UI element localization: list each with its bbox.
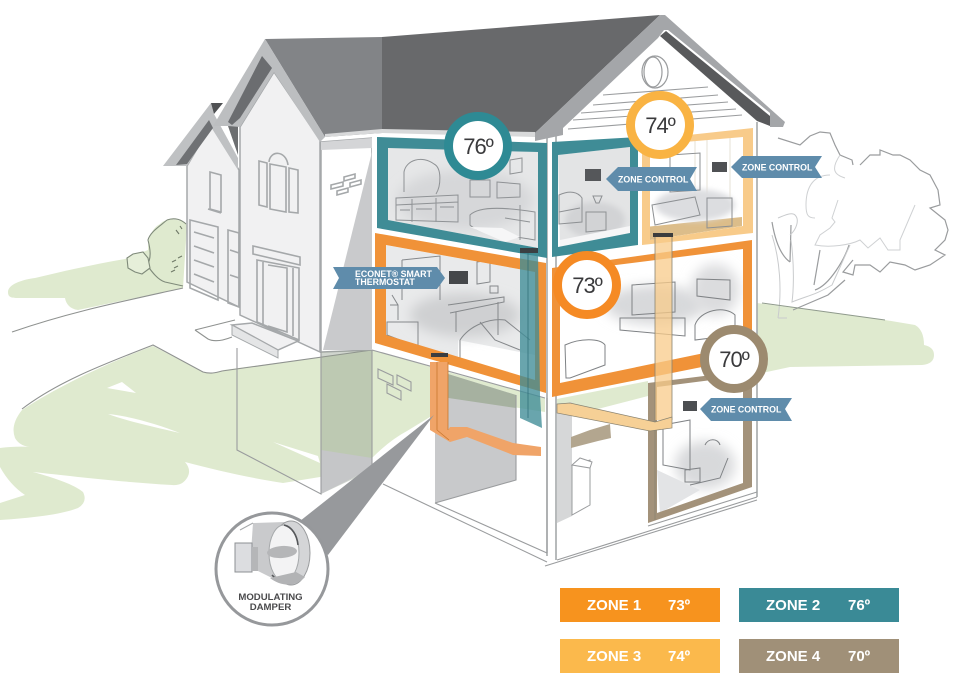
badge: 70 degrees: 70º (719, 347, 750, 372)
furniture: zone 1 left bedroom (385, 245, 535, 380)
furniture: zone 2 right bedroom (558, 147, 630, 247)
zone 3 frame (642, 128, 753, 245)
badge: 74 degrees: 74º (645, 113, 676, 138)
duct: zone 3 vertical (653, 233, 673, 520)
zone 4 frame (648, 370, 752, 523)
legend: zone 3: ZONE 3 (587, 648, 641, 665)
lawn (0, 220, 934, 520)
legend: zone 2 (739, 588, 899, 622)
shrub (127, 219, 186, 286)
zone 1 frames (375, 233, 752, 397)
front windows (259, 153, 298, 213)
callout: econet smart thermostat (333, 267, 445, 289)
side wall (321, 138, 372, 352)
legend: zone 1: 73º (668, 597, 691, 614)
path lines (12, 288, 372, 409)
duct: zone 3 horizontal (557, 403, 672, 431)
bricks (331, 174, 361, 195)
house shell (163, 15, 785, 560)
tree (762, 132, 948, 320)
wall shadow (323, 152, 372, 350)
rear gable roof (163, 103, 238, 170)
legend: zone 3: 74º (668, 648, 691, 665)
garage door (190, 172, 239, 307)
left roof (265, 37, 382, 137)
callout wedge to damper (300, 415, 434, 555)
icon: damper (235, 521, 310, 585)
green through basement (557, 381, 648, 411)
furniture: zone 3 bedroom (645, 137, 742, 240)
zone 2 frames (377, 137, 638, 258)
badge: 70 degrees (704, 330, 764, 388)
legend: zone 1 (560, 588, 720, 622)
legend: zone 4: ZONE 4 (766, 648, 821, 665)
furniture: zone 2 left bedroom (387, 147, 538, 248)
legend: zone 2: 76º (848, 597, 871, 614)
callout: zone control right: ZONE CONTROL (742, 162, 813, 172)
rear gable wall (187, 125, 239, 307)
steps (232, 323, 298, 358)
callout: zone control lower: ZONE CONTROL (711, 404, 782, 414)
furniture: zone 4 room (657, 375, 743, 513)
damper callout: DAMPER (250, 602, 291, 613)
legend: zone 4: 70º (848, 648, 871, 665)
basement lines (237, 348, 757, 566)
duct: zone 4 horizontal (571, 424, 611, 448)
front door (253, 246, 300, 340)
main roof (382, 15, 660, 133)
callout: zone control right (731, 156, 822, 178)
callout: econet smart thermostat: THERMOSTAT (355, 277, 415, 287)
siding (568, 87, 742, 129)
legend: zone 3 (560, 639, 720, 673)
attic vent (642, 56, 668, 88)
legend: zone 4 (739, 639, 899, 673)
callout: econet smart thermostat: ECONET® SMART (355, 269, 432, 279)
duct: zone 1 (430, 353, 541, 456)
water heater (572, 458, 592, 515)
basement shadow planes (321, 350, 372, 494)
badge: 74 degrees (630, 96, 690, 154)
damper callout (216, 513, 328, 625)
badge: 73 degrees (558, 256, 616, 314)
upper main wall (372, 137, 556, 400)
damper label: MODULATING (238, 592, 303, 603)
right gable roof (535, 15, 785, 141)
callout: zone control left (606, 167, 697, 191)
duct: zone 2 vertical (520, 248, 542, 428)
badge: 73 degrees: 73º (572, 273, 603, 298)
front gable eave (213, 39, 325, 142)
right gable wall (547, 38, 757, 556)
furniture: zone 1 right living room (560, 245, 743, 383)
legend: zone 2: ZONE 2 (766, 597, 820, 614)
badge: 76 degrees: 76º (463, 134, 494, 159)
badge: 76 degrees (448, 116, 508, 176)
basement (237, 348, 757, 566)
legend: zone 1: ZONE 1 (587, 597, 641, 614)
callout: zone control lower (700, 398, 792, 421)
callout: zone control left: ZONE CONTROL (618, 174, 689, 184)
front wall (240, 72, 320, 352)
